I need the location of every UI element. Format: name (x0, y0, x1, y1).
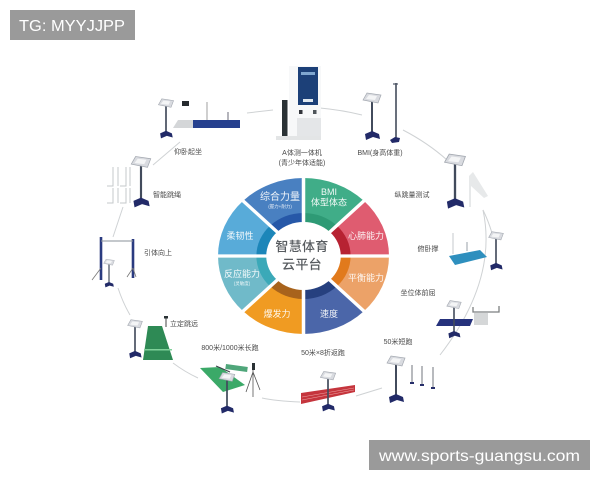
center title (275, 239, 329, 272)
segment labels: 柔韧性 (226, 230, 254, 241)
badge: top-left channel tag (10, 10, 135, 40)
badge: bottom-right website (369, 440, 590, 470)
station: BMI (357, 83, 403, 157)
segment labels: 爆发力 (263, 308, 291, 319)
station: standing long jump (128, 316, 198, 360)
donut segments (216, 176, 391, 336)
center title: 云平台 (282, 257, 322, 272)
segment labels: 反应能力 (224, 268, 260, 279)
station: all-in-one kiosk (276, 66, 325, 167)
badge: top-left channel tag: TG: MYYJJPP (19, 18, 125, 35)
station: sit and reach (400, 288, 499, 338)
station: 800 m / 1000 m run (200, 343, 260, 413)
segment labels: (握力+耐力) (268, 203, 292, 210)
station: sit and reach: 坐位体前屈 (400, 288, 436, 297)
station: 50 m sprint: 50米短跑 (384, 337, 412, 346)
station: 50 m x 8 shuttle run (301, 348, 355, 411)
station: sit-up (158, 99, 240, 156)
station: vertical jump: 纵跳量测试 (394, 190, 430, 199)
segment labels (224, 187, 384, 319)
station: pull-up: 引体向上 (144, 248, 172, 257)
station: smart jump rope (107, 157, 181, 207)
station: 50 m x 8 shuttle run: 50米×8折返跑 (301, 348, 345, 357)
station: vertical jump (394, 154, 488, 209)
segment labels: 平衡能力 (348, 272, 384, 283)
segment labels: 综合力量 (260, 190, 300, 203)
station: 50 m sprint (384, 337, 435, 403)
segment labels: 速度 (320, 308, 338, 319)
station: push-up: 俯卧撑 (418, 244, 438, 253)
connecting ring (113, 108, 492, 402)
infographic diagram (92, 66, 503, 413)
station: all-in-one kiosk: A体测一体机 (282, 148, 322, 157)
segment labels: BMI (321, 187, 337, 197)
segment labels: 心肺能力 (348, 230, 384, 241)
center title: 智慧体育 (275, 239, 329, 254)
segment labels: 体型体态 (311, 196, 347, 208)
badge: bottom-right website: www.sports-guangsu.com (378, 448, 580, 465)
station: push-up (418, 232, 503, 270)
segment labels: (灵敏度) (234, 280, 251, 287)
station: standing long jump: 立定跳远 (170, 319, 198, 328)
station: BMI: BMI(身高体重) (357, 148, 403, 157)
donut chart: eight fitness abilities (216, 176, 391, 336)
station: smart jump rope: 智能跳绳 (153, 190, 181, 199)
station: 800 m / 1000 m run: 800米/1000米长跑 (201, 343, 259, 352)
station: sit-up: 仰卧起坐 (174, 147, 202, 156)
station: pull-up (92, 237, 172, 287)
station: all-in-one kiosk: (青少年体适能) (279, 158, 325, 167)
